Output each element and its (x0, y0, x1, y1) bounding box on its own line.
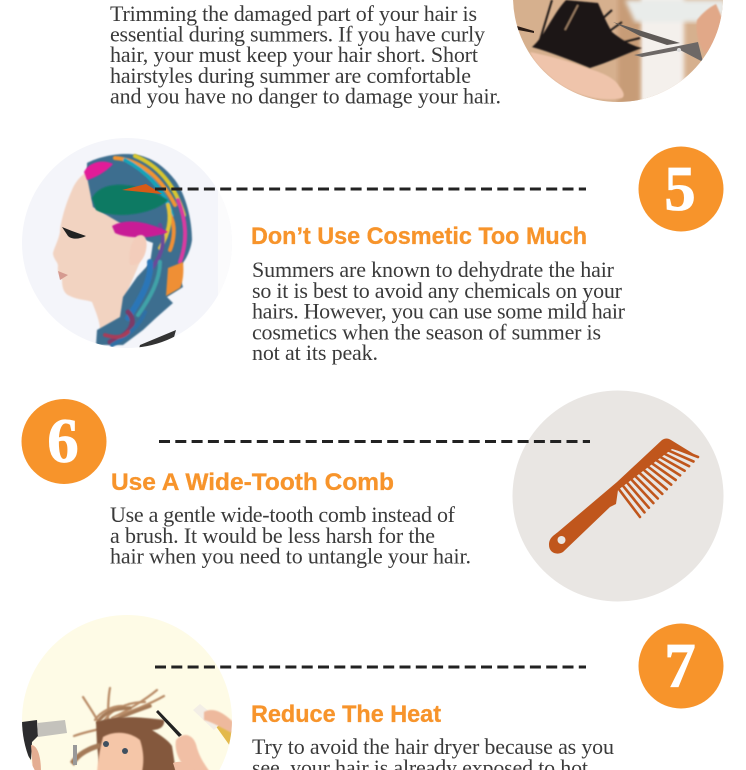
badge: number 6 (22, 399, 106, 484)
tip 4 text: trimming: hair, your must keep your hair short. Short (110, 42, 478, 67)
hair base: braid silhouette (87, 154, 192, 345)
step divider 6 (159, 440, 590, 443)
flying hair (74, 688, 164, 736)
tip 7 text: Try to avoid the hair dryer because as you (252, 734, 614, 759)
hair: magenta streaks (84, 162, 113, 180)
tip 4 text: trimming (110, 1, 501, 108)
tip 6 text: a brush. It would be less harsh for the (110, 523, 435, 548)
tip 4 text: trimming: hairstyles during summer are comfortable (110, 63, 471, 88)
tip 6 text (110, 502, 471, 568)
icon: hair spray and hand (194, 704, 232, 745)
step divider 5 (155, 188, 586, 190)
neck and face (53, 170, 146, 330)
eye and lips (62, 227, 86, 239)
photo: wide-tooth comb (512, 390, 724, 602)
tip 6 text: hair when you need to untangle your hair. (110, 544, 471, 568)
face (97, 733, 143, 770)
hair strands: colour streaks (105, 156, 185, 345)
badge: number 6: 6 (47, 406, 79, 476)
icon: hair dryer (22, 720, 77, 770)
tip 5 text (252, 257, 626, 365)
hair mass (96, 717, 176, 770)
tip 5 text: not at its peak. (252, 340, 378, 365)
badge: number 7: 7 (664, 631, 696, 701)
badge: number 5 (638, 146, 724, 232)
hair: orange lower braid (166, 262, 183, 296)
photo: scissors trimming hair (510, 0, 730, 105)
icon: dark hair tuft (532, 0, 642, 68)
icon: comb and hand (156, 710, 210, 770)
tip 6 text: Use a gentle wide-tooth comb instead of (110, 502, 456, 527)
tip 4 text: trimming: essential during summers. If you have curly (110, 22, 485, 46)
tip 7 text (252, 734, 614, 770)
icon: scissors (613, 22, 703, 62)
tip 5 text: Summers are known to dehydrate the hair (252, 257, 615, 282)
badge: number 5: 5 (664, 154, 696, 224)
icon: right fingers (696, 4, 723, 54)
ear (134, 234, 148, 262)
photo: woman with rainbow braided hair (22, 138, 218, 348)
tip 5 text: cosmetics when the season of summer is (252, 320, 601, 344)
tip 4 text: trimming: and you have no danger to damage your hair. (110, 84, 501, 108)
tip 6 heading: Use A Wide-Tooth Comb (111, 469, 394, 496)
tip 5 text: so it is best to avoid any chemicals on your (252, 278, 623, 303)
photo: woman surrounded by heat styling tools (20, 612, 240, 770)
badge: number 7 (638, 624, 724, 708)
tip 5 text: hairs. However, you can use some mild hair (252, 298, 626, 324)
icon: hand holding hair (530, 52, 624, 99)
hair: green crown (92, 185, 168, 215)
tip 7 heading: Reduce The Heat (251, 701, 441, 728)
tip 4 text: trimming: Trimming the damaged part of your hair is (110, 1, 477, 26)
icon: comb (549, 438, 698, 554)
tip 5 heading: Don’t Use Cosmetic Too Much (251, 223, 587, 250)
step divider 7 (155, 666, 586, 668)
